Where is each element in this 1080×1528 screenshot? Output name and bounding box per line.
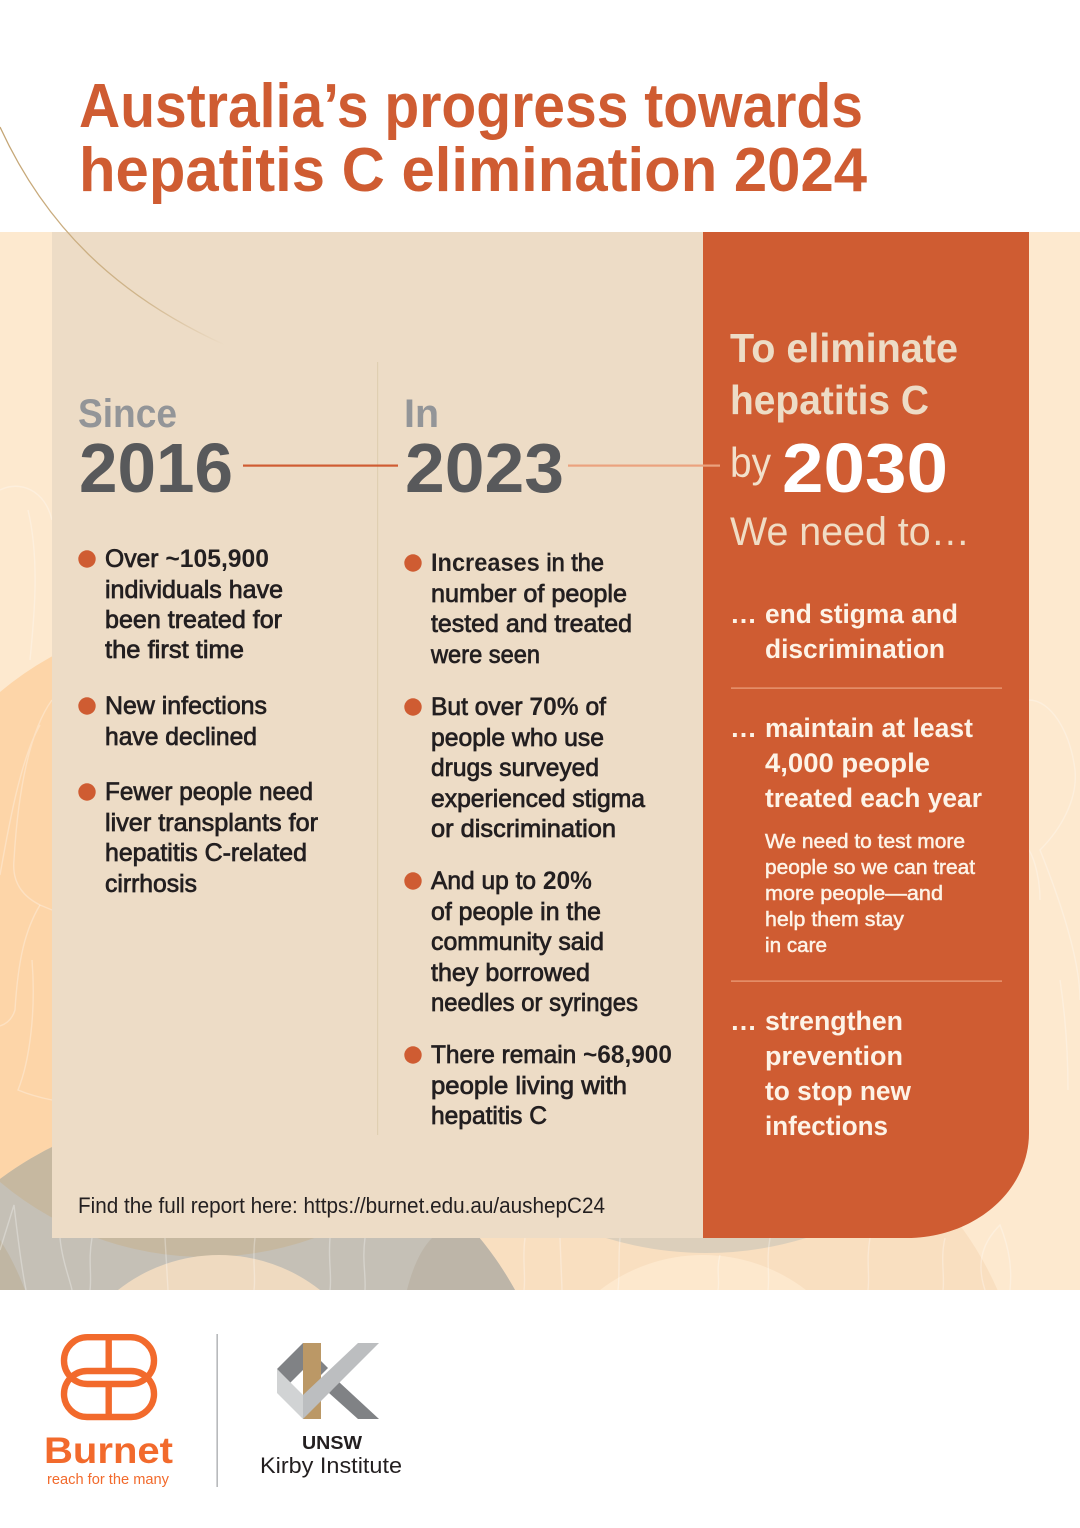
action divider 1 <box>731 688 1002 689</box>
bullet: stigma: people who use <box>431 724 604 752</box>
list: since 2016 <box>78 545 318 898</box>
logo: UNSW Kirby Institute: Kirby Institute <box>260 1453 402 1478</box>
note: test more people: We need to test more <box>765 830 965 853</box>
logo: Burnet: reach for the many <box>47 1472 170 1488</box>
bullet: increases: were seen <box>430 641 540 669</box>
bullet: people living with hepatitis C: There remain ~68,900 <box>431 1041 672 1069</box>
bullet: needles: And up to 20% <box>431 867 592 895</box>
heading: since 2016: Since <box>78 392 177 436</box>
bullet: needles: community said <box>431 928 604 956</box>
bullet: treated <box>78 545 283 664</box>
action: maintain treatment: … <box>730 713 757 743</box>
background band with organic shapes <box>0 232 1080 1290</box>
action: end stigma: … <box>730 599 757 629</box>
panel heading: to eliminate by 2030: We need to… <box>730 510 970 554</box>
left content panel <box>52 232 703 1238</box>
bullet: treated: the first time <box>105 636 244 664</box>
action: maintain treatment: maintain at least <box>765 713 973 743</box>
logo: UNSW Kirby Institute: UNSW <box>302 1433 362 1453</box>
title <box>79 72 867 205</box>
bullet: increases <box>404 549 632 669</box>
logo: UNSW Kirby Institute <box>260 1343 402 1478</box>
action: strengthen prevention: prevention <box>765 1041 903 1071</box>
bullet: stigma: experienced stigma <box>431 785 645 813</box>
panel heading: to eliminate by 2030 <box>730 325 970 554</box>
bullet: infections <box>78 692 267 751</box>
note: test more people <box>765 830 975 957</box>
action: maintain treatment <box>730 713 982 957</box>
action: strengthen prevention: … <box>730 1006 757 1036</box>
bullet: transplants: cirrhosis <box>105 870 197 898</box>
bullet: people living with hepatitis C: hepatitis C <box>431 1102 547 1130</box>
bullet: transplants: liver transplants for <box>105 809 318 837</box>
note: test more people: people so we can treat <box>765 856 975 879</box>
bullet: stigma: But over 70% of <box>431 693 606 721</box>
bullet: treated: individuals have <box>105 576 283 604</box>
panel heading: to eliminate by 2030: by <box>730 439 771 486</box>
panel heading: to eliminate by 2030: hepatitis C <box>730 377 929 423</box>
timeline line 2023 to 2030 <box>568 464 720 467</box>
bullet: treated: been treated for <box>105 606 282 634</box>
action: end stigma: end stigma and <box>765 599 958 629</box>
logo: Burnet: Burnet <box>44 1430 173 1471</box>
action: strengthen prevention: to stop new <box>765 1076 912 1106</box>
bullet: stigma: or discrimination <box>431 815 616 843</box>
bullet: infections: have declined <box>105 723 257 751</box>
bullet: needles: needles or syringes <box>431 989 638 1017</box>
decorative arc <box>0 127 225 345</box>
column divider <box>377 362 378 1135</box>
note: test more people: in care <box>765 934 827 957</box>
heading: since 2016 <box>78 392 233 507</box>
heading: since 2016: 2016 <box>79 429 233 507</box>
action: strengthen prevention <box>730 1006 912 1141</box>
bullet: transplants: hepatitis C-related <box>105 839 307 867</box>
action: maintain treatment: treated each year <box>765 783 982 813</box>
bullet: increases: number of people <box>431 580 627 608</box>
action divider 2 <box>731 980 1002 982</box>
report link: Find the full report here: https://burnet.edu.au/aushepC24 <box>78 1193 605 1218</box>
bullet: transplants <box>78 778 318 898</box>
action: strengthen prevention: infections <box>765 1111 888 1141</box>
bullet: needles: of people in the <box>431 898 601 926</box>
panel heading: to eliminate by 2030: 2030 <box>782 429 948 507</box>
action: strengthen prevention: strengthen <box>765 1006 903 1036</box>
panel heading: to eliminate by 2030: To eliminate <box>730 325 958 371</box>
note: test more people: more people—and <box>765 882 943 905</box>
timeline line 2016 to 2023 <box>243 464 398 467</box>
bullet: treated: Over ~105,900 <box>105 545 269 573</box>
bullet: needles <box>404 867 638 1017</box>
bullet: transplants: Fewer people need <box>105 778 313 806</box>
bullet: people living with hepatitis C: people living with <box>431 1072 627 1100</box>
action: maintain treatment: 4,000 people <box>765 748 930 778</box>
logo: Burnet <box>44 1337 173 1488</box>
action: end stigma: discrimination <box>765 634 945 664</box>
title: Australia’s progress towards <box>79 72 863 141</box>
bullet: stigma <box>404 693 645 843</box>
orange panel <box>703 232 1029 1238</box>
heading: in 2023: In <box>404 392 439 436</box>
heading: in 2023: 2023 <box>405 429 564 507</box>
action: end stigma <box>730 599 958 664</box>
list: in 2023 <box>404 549 672 1130</box>
heading: in 2023 <box>404 392 564 507</box>
bullet: people living with hepatitis C <box>404 1041 672 1130</box>
logo divider <box>216 1334 218 1487</box>
bullet: infections: New infections <box>105 692 267 720</box>
bullet: increases: Increases in the <box>431 549 604 577</box>
bullet: stigma: drugs surveyed <box>431 754 599 782</box>
title: hepatitis C elimination 2024 <box>79 136 867 205</box>
note: test more people: help them stay <box>765 908 905 931</box>
bullet: increases: tested and treated <box>431 610 632 638</box>
bullet: needles: they borrowed <box>431 959 590 987</box>
